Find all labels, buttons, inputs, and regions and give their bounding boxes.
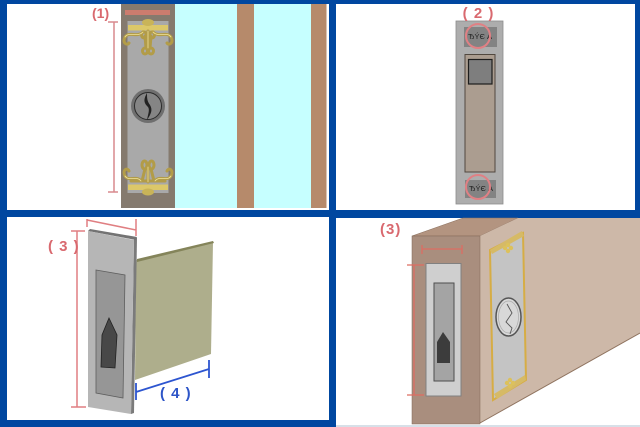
hook latch [101, 318, 117, 368]
label (4): ( 4 ) [160, 385, 192, 402]
door long face [480, 218, 640, 423]
wooden frame bars [237, 4, 326, 208]
recess [465, 54, 495, 172]
panel: handle in perspective with latch blade [7, 217, 329, 420]
dimension (3) [407, 245, 462, 395]
door stile [121, 4, 175, 208]
panel: door edge in perspective [336, 218, 640, 427]
ornate side plate [490, 231, 526, 400]
rosette: bottom [505, 378, 515, 388]
knob [131, 89, 165, 123]
door end [412, 236, 480, 424]
dimension (4) width [136, 360, 209, 400]
bottom screw label [465, 175, 496, 199]
top screw label: ЂÝЄ A [468, 32, 492, 41]
dimension (1) height [108, 10, 170, 192]
plate top [88, 229, 137, 240]
glass panes [175, 4, 311, 208]
label (3): ( 3 ) [48, 238, 80, 255]
top screw label [464, 24, 497, 48]
label (1): (1) [92, 5, 109, 21]
label (2): ( 2 ) [463, 5, 494, 22]
ornament: top [124, 19, 172, 54]
dimension (3) height [71, 219, 136, 407]
label (3): (3) [380, 221, 401, 238]
recess [96, 270, 125, 398]
side knob [496, 298, 521, 336]
handle plate [128, 21, 168, 193]
plate side [131, 238, 137, 414]
ornament: bottom [124, 161, 172, 196]
bottom screw label: ЂÝЄ A [469, 184, 493, 193]
hook latch [437, 332, 450, 363]
edge plate [456, 21, 503, 204]
door top [412, 218, 518, 236]
recess [434, 283, 454, 381]
panel: door edge with plate [336, 4, 635, 210]
blade [135, 241, 214, 380]
square latch [468, 60, 492, 84]
end plate [426, 264, 461, 396]
rosette: top [503, 243, 513, 253]
plate face [88, 231, 134, 414]
panel: door front with ornate handle [7, 4, 329, 210]
